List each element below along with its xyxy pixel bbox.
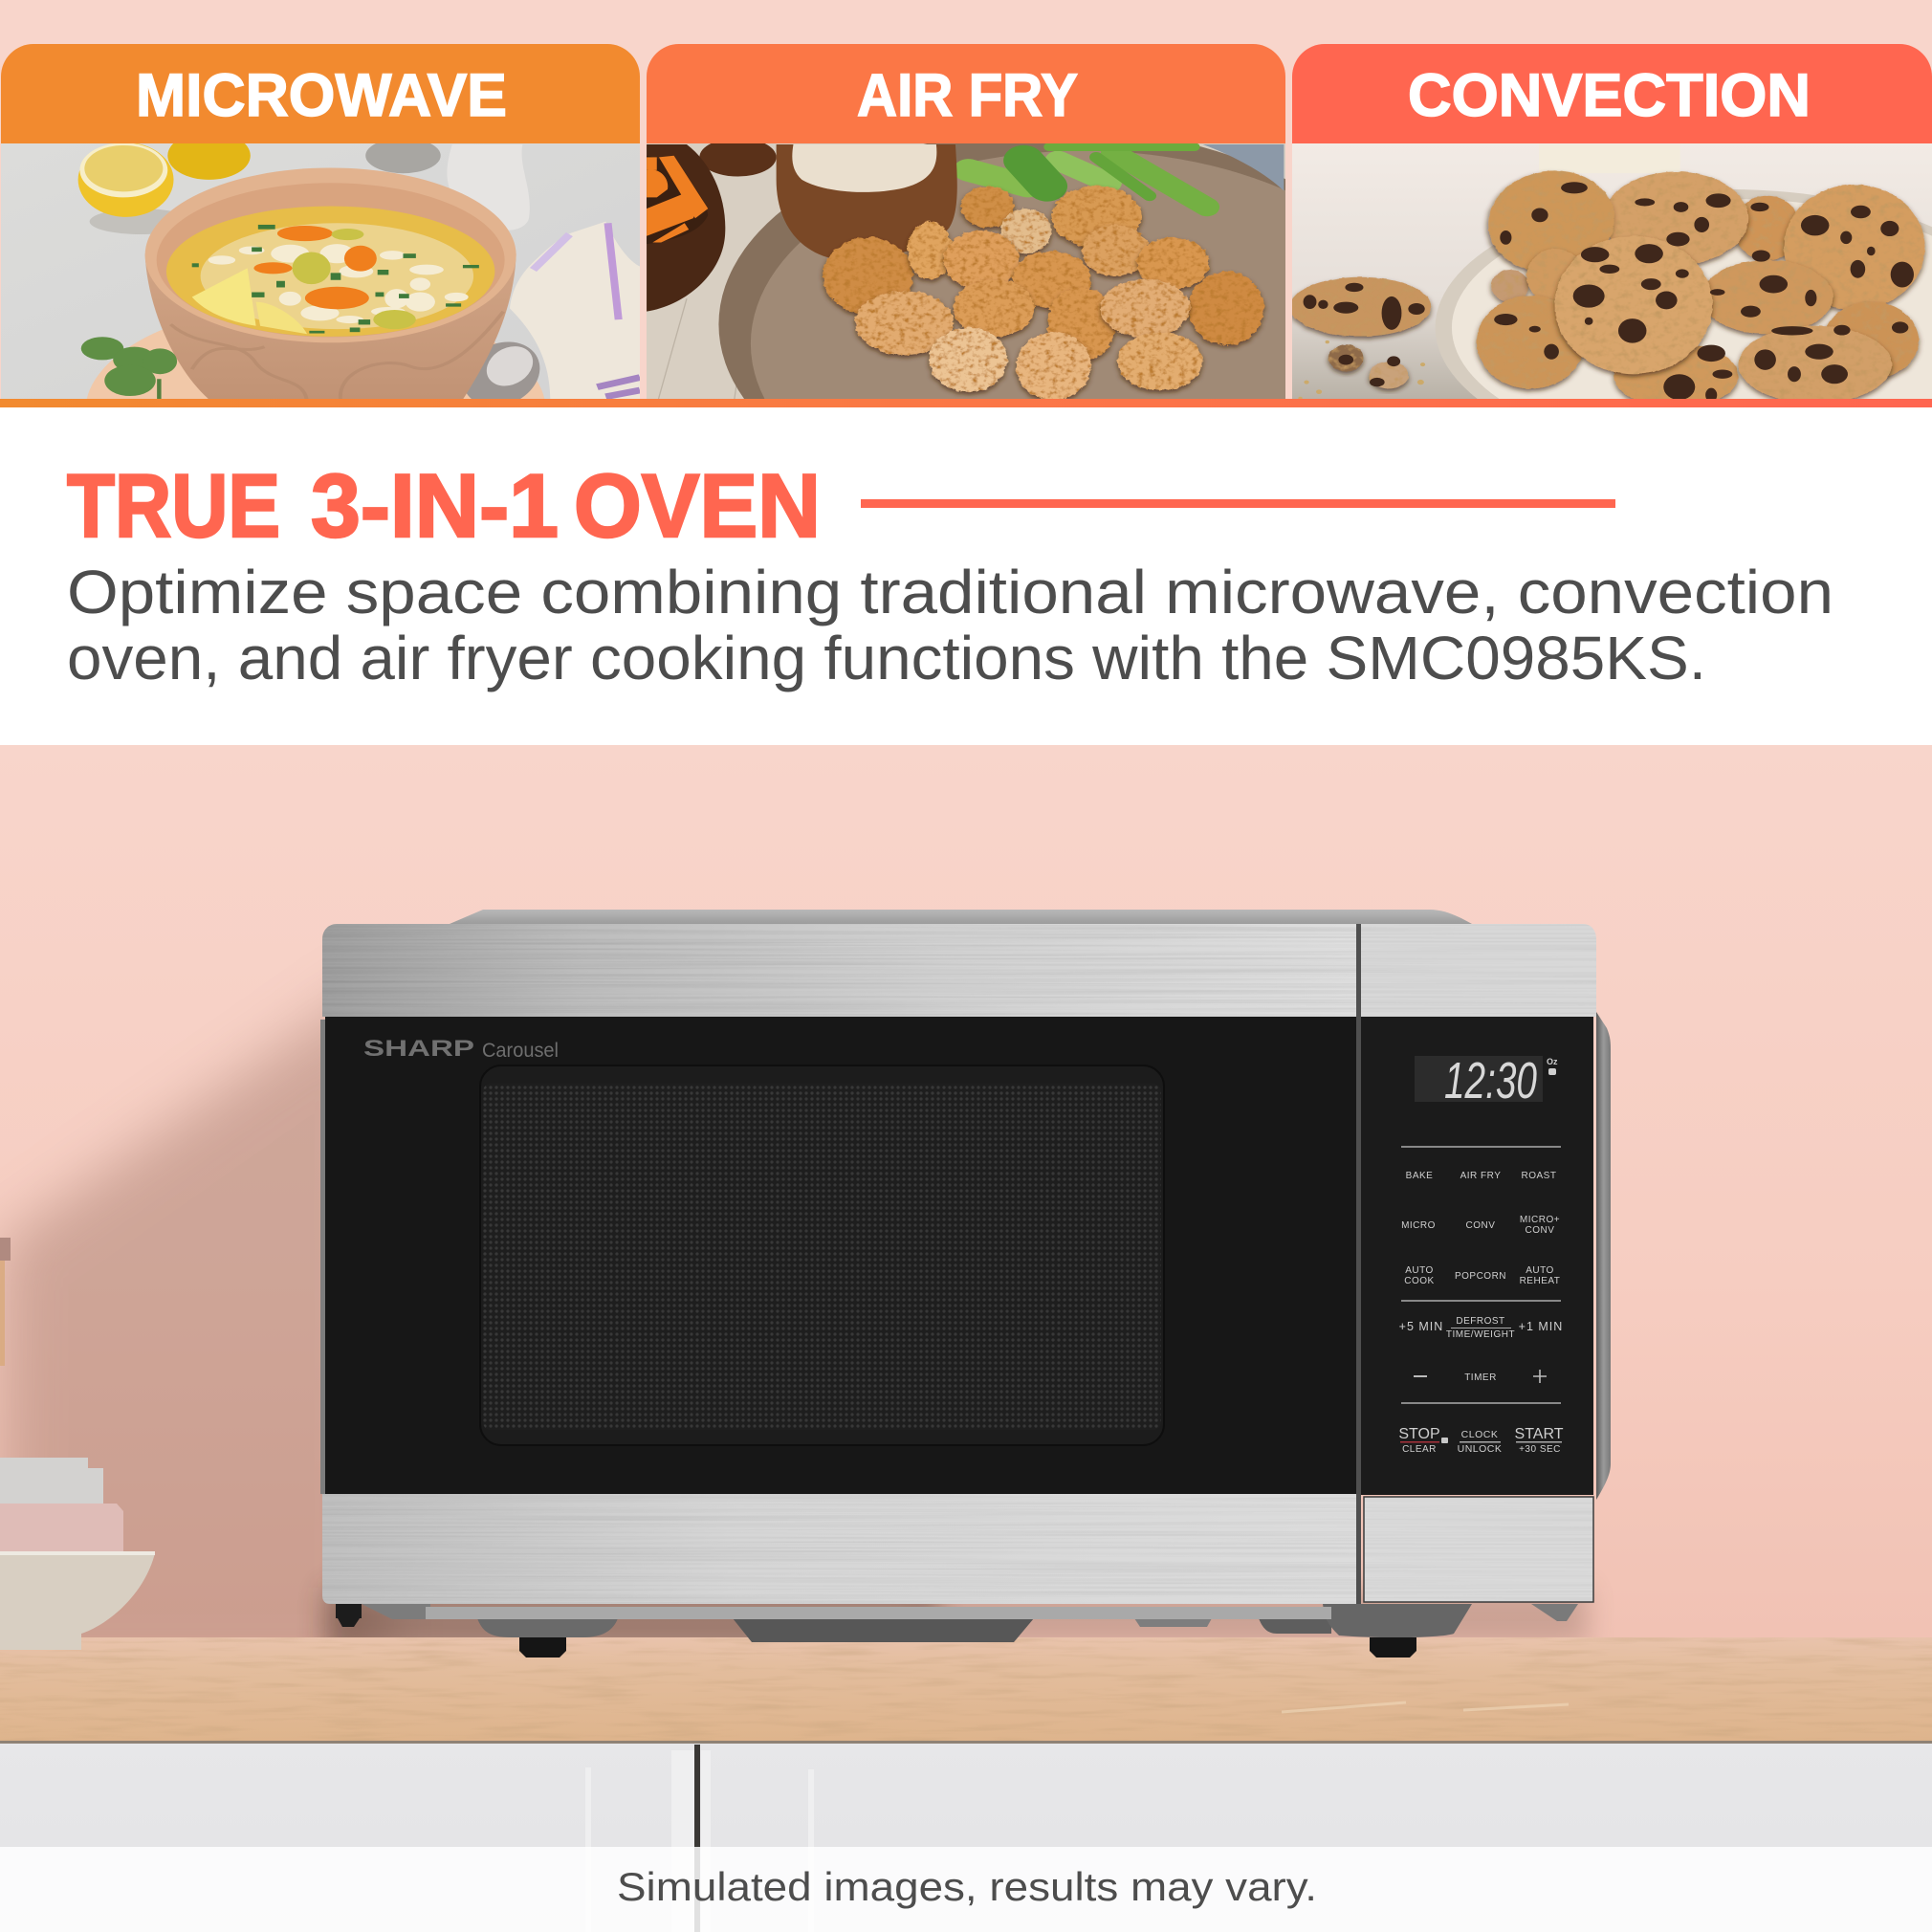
header: AIR FRY	[647, 44, 1285, 143]
top back housing	[450, 910, 1472, 924]
panel buttons: +5 MIN	[1399, 1320, 1443, 1333]
panel buttons: UNLOCK	[1458, 1443, 1502, 1455]
kitchen wall	[0, 979, 1932, 1637]
lower control steel plate	[1364, 1497, 1593, 1602]
door bottom steel band	[322, 1494, 1356, 1604]
cabinet door gap	[694, 1745, 700, 1932]
panel buttons: BAKE	[1406, 1171, 1433, 1181]
control top steel band	[1361, 924, 1596, 1017]
counter top	[0, 1637, 1932, 1744]
heading	[67, 455, 821, 556]
display: 12:30	[1444, 1052, 1537, 1109]
right side housing	[1596, 1012, 1611, 1500]
panel buttons: TIMER	[1464, 1372, 1497, 1383]
heading rule	[861, 499, 1615, 508]
display: Oz	[1547, 1057, 1558, 1066]
photo: air fried nuggets	[647, 143, 1285, 399]
panel buttons: CONV	[1526, 1225, 1554, 1236]
brand logo: SHARP	[363, 1036, 474, 1062]
panel buttons: AUTO	[1405, 1265, 1434, 1276]
door window mesh	[480, 1065, 1164, 1445]
base feet and tray	[336, 1603, 1578, 1658]
header: MICROWAVE	[1, 44, 640, 143]
panel buttons: AIR FRY	[1460, 1171, 1501, 1181]
button rules	[1400, 1328, 1562, 1443]
heading: OVEN	[574, 455, 821, 556]
panel buttons: REHEAT	[1520, 1276, 1560, 1286]
panel buttons: CLEAR	[1402, 1444, 1437, 1455]
panel buttons: COOK	[1404, 1276, 1435, 1286]
panel buttons: TIME/WEIGHT	[1446, 1329, 1515, 1340]
body text	[67, 558, 1833, 692]
wall shadow left of microwave	[0, 976, 1588, 1683]
photo: chocolate chip cookies	[1292, 143, 1932, 399]
header: AIR FRY: AIR FRY	[857, 62, 1078, 129]
panel buttons: STOP	[1398, 1426, 1440, 1442]
body text: oven, and air fryer cooking functions with the SMC0985KS.	[67, 624, 1706, 692]
panel buttons	[1398, 1171, 1564, 1455]
door top steel band	[322, 924, 1356, 1017]
panel buttons: MICRO+	[1520, 1215, 1560, 1225]
panel buttons: +30 SEC	[1519, 1444, 1561, 1455]
panel buttons: START	[1515, 1426, 1564, 1442]
microwave	[320, 910, 1611, 1658]
panel: convection mode	[1292, 44, 1932, 399]
panel buttons: +1 MIN	[1519, 1320, 1563, 1333]
panel buttons: POPCORN	[1455, 1271, 1506, 1282]
jar at far left	[0, 1238, 11, 1366]
caption band	[0, 1847, 1932, 1932]
control panel	[1361, 1017, 1593, 1495]
header: CONVECTION: CONVECTION	[1408, 62, 1811, 129]
panel buttons: AUTO	[1526, 1265, 1554, 1276]
top background band	[0, 0, 1932, 411]
body text: Optimize space combining traditional microwave, convection	[67, 558, 1833, 626]
photo: lemon orzo soup	[1, 143, 640, 399]
header: MICROWAVE: MICROWAVE	[136, 62, 507, 129]
panel buttons: CLOCK	[1461, 1429, 1498, 1440]
brand logo	[363, 1036, 559, 1062]
stacked bowls	[0, 1458, 155, 1650]
white text panel	[0, 407, 1932, 745]
black door glass	[325, 1017, 1356, 1494]
panel: microwave mode	[1, 44, 640, 399]
brand logo: Carousel	[482, 1040, 559, 1062]
panel buttons: MICRO	[1401, 1220, 1436, 1231]
caption: Simulated images, results may vary.	[617, 1864, 1317, 1909]
panel: air fry mode	[647, 44, 1285, 399]
gradient strip under photos	[0, 399, 1932, 407]
heading: TRUE	[67, 455, 280, 556]
panel dividers	[1401, 1146, 1561, 1404]
divider	[1356, 924, 1361, 1604]
panel buttons: DEFROST	[1456, 1316, 1505, 1327]
header: CONVECTION	[1292, 44, 1932, 143]
left side edge	[320, 1020, 325, 1494]
lower cabinets	[0, 1744, 1932, 1932]
panel buttons: CONV	[1466, 1220, 1495, 1231]
heading: 3-IN-1	[311, 455, 559, 556]
panel buttons: ROAST	[1522, 1171, 1556, 1181]
